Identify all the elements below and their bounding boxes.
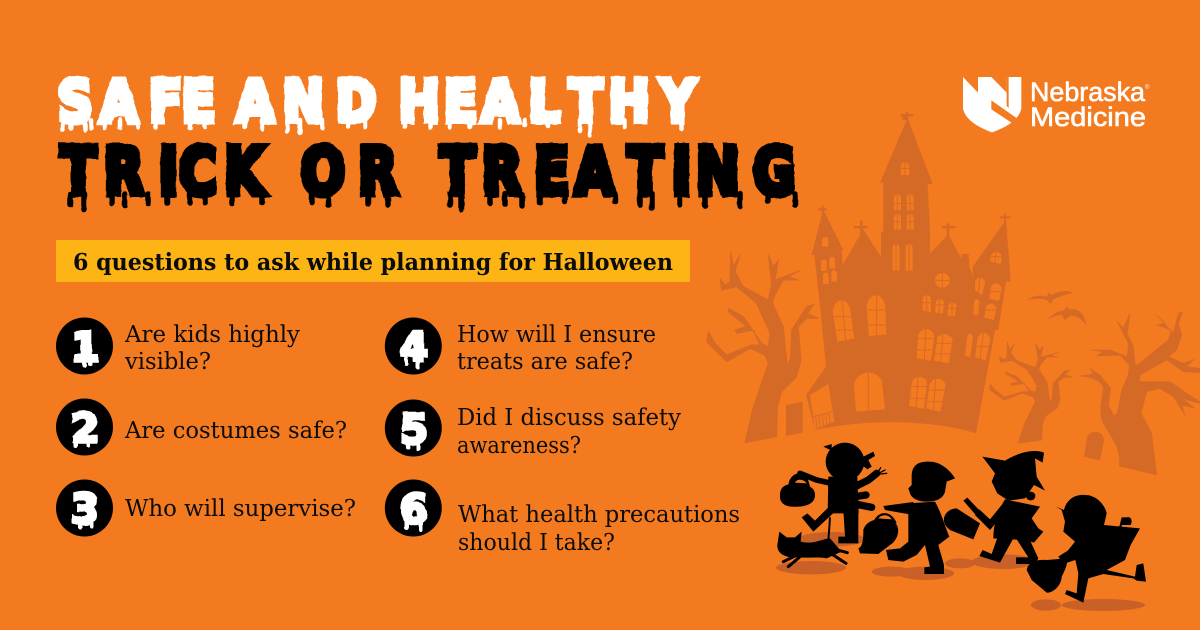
bats xyxy=(1027,291,1087,326)
gravestone: left xyxy=(786,402,803,436)
question 5 xyxy=(385,400,681,459)
question 6 xyxy=(385,480,740,556)
house xyxy=(806,112,1011,433)
tree: left xyxy=(707,252,818,443)
question 2: Are costumes safe? xyxy=(124,418,347,444)
banner: subtitle xyxy=(56,240,690,282)
tree: far right xyxy=(1081,312,1200,475)
gravestone: right xyxy=(1084,432,1104,461)
tree: middle right xyxy=(989,342,1073,443)
question 5: 5 xyxy=(400,407,428,453)
logo: Nebraska Medicine: Nebraska xyxy=(1030,77,1146,107)
question 4: treats are safe? xyxy=(457,349,633,375)
question 6: What health precautions xyxy=(458,502,740,528)
child 3 witch with bag xyxy=(944,451,1045,564)
question 5: awareness? xyxy=(457,433,581,459)
question 4: How will I ensure xyxy=(457,322,656,348)
question 1: 1 xyxy=(71,325,99,371)
child 4 vampire with bag xyxy=(1027,495,1146,603)
question 5: Did I discuss safety xyxy=(457,405,681,431)
haunted house and trees background xyxy=(707,112,1104,461)
children silhouettes xyxy=(776,443,1146,611)
question 2: 2 xyxy=(71,406,99,452)
child 2 with bag xyxy=(858,462,955,574)
question 3: 3 xyxy=(71,487,99,533)
title line: Safe and Healthy: SAFE AND HEALTHY xyxy=(57,67,697,135)
logo: Nebraska Medicine: Medicine xyxy=(1030,102,1146,132)
ground shadows xyxy=(776,532,1145,611)
logo: Nebraska Medicine: ® xyxy=(1145,84,1150,91)
banner: subtitle: 6 questions to ask while planning for Halloween xyxy=(73,249,673,276)
cat xyxy=(777,517,847,567)
question 1: Are kids highly xyxy=(124,322,300,348)
question 6: 6 xyxy=(400,487,428,533)
logo: Nebraska Medicine xyxy=(963,77,1150,132)
question 1: visible? xyxy=(124,349,211,375)
question 3 xyxy=(56,480,356,536)
question 4 xyxy=(385,318,656,375)
question 6: should I take? xyxy=(458,530,615,556)
question 1 xyxy=(56,318,300,375)
question 2 xyxy=(56,398,347,456)
child 1 with bag xyxy=(780,443,887,543)
question 3: Who will supervise? xyxy=(125,496,356,522)
title line: Trick or Treating: TRICK OR TREATING xyxy=(60,133,796,209)
question 4: 4 xyxy=(400,325,428,371)
